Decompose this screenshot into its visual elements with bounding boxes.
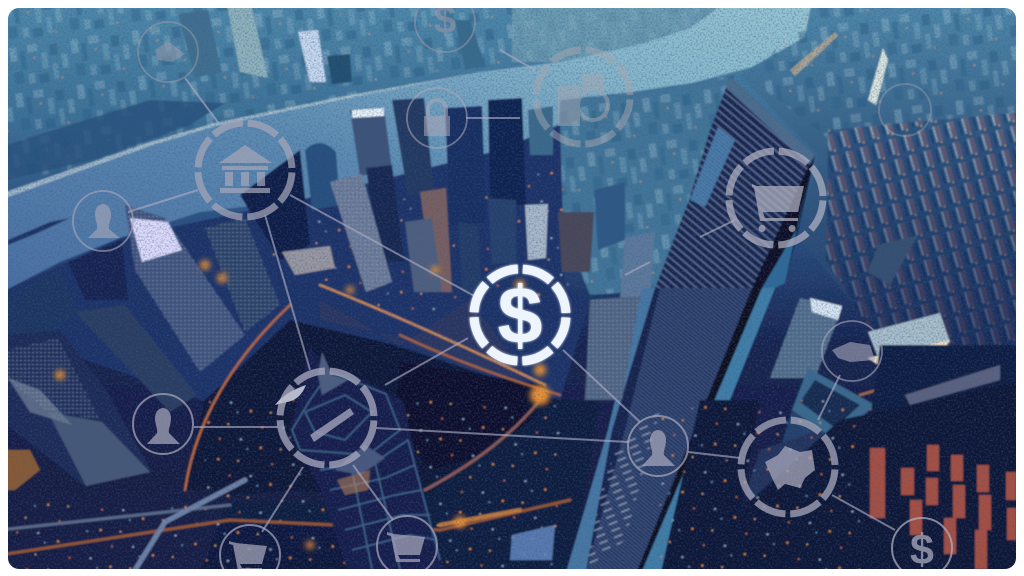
red-roofed houses (870, 445, 1016, 569)
icon: central dollar ring (474, 269, 566, 361)
river (0, 0, 812, 293)
icon: central ring with arrows (275, 371, 374, 465)
icon: person node left (73, 191, 133, 251)
dark plaza (180, 320, 560, 500)
Jin Mao tower (290, 345, 447, 576)
icon: person node lower left (133, 394, 193, 454)
glowing roads (8, 282, 876, 569)
main tower (565, 77, 815, 576)
icon: lock node (407, 88, 467, 148)
icon: cart node bottom left (220, 525, 280, 576)
dark ship reflection (8, 218, 70, 245)
icon: map ring (741, 420, 835, 514)
north bank (0, 100, 225, 182)
icon: map node right (822, 321, 882, 381)
district between river and tower (559, 92, 709, 296)
icon: bank ring (198, 123, 292, 217)
icon: person node centre right (628, 416, 688, 476)
icon: map node top (138, 22, 198, 82)
network connector lines (128, 50, 895, 532)
skyscrapers left (350, 108, 392, 176)
icon: money ring (536, 50, 630, 144)
far side district texture (8, 8, 718, 189)
icon: cart node bottom (377, 516, 437, 576)
icon: dollar node bottom right (892, 518, 952, 576)
mid-left and central ground (0, 125, 590, 400)
pale upstream (512, 8, 714, 62)
icon: dollar node bottom right: $ (910, 526, 934, 574)
far towers (178, 10, 222, 78)
icon: dollar node top (414, 8, 476, 53)
orange street glows (52, 256, 556, 555)
neighbouring towers (585, 296, 640, 400)
icon: shopping cart ring (729, 151, 823, 245)
icon: faint node upper right (879, 84, 931, 136)
icon: central dollar ring: $ (497, 271, 543, 361)
right city (769, 102, 1016, 346)
